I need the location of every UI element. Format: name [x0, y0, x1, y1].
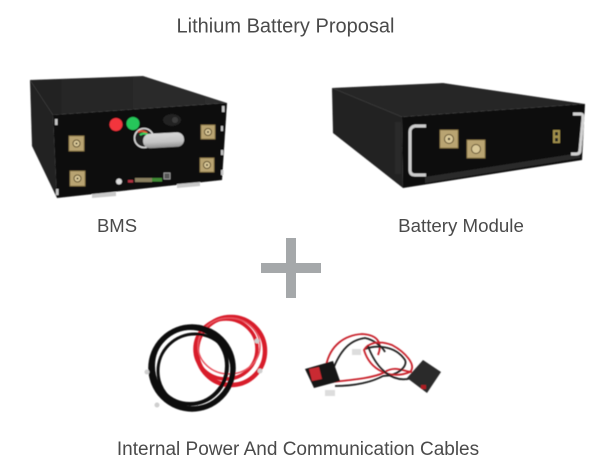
communication ports — [553, 130, 560, 143]
BMS ports row — [116, 173, 170, 184]
BMS brass terminals — [69, 125, 215, 186]
module brass terminals — [440, 130, 485, 158]
right handle — [571, 114, 583, 154]
white connectors — [325, 349, 361, 396]
module side face — [332, 88, 403, 188]
BMS rotary knob — [163, 114, 181, 126]
rocker switch — [305, 361, 340, 388]
BMS mounting feet — [92, 182, 200, 198]
BMS green indicator — [126, 117, 140, 130]
black power cable — [151, 327, 233, 409]
power cables illustration — [144, 317, 265, 409]
module front panel — [402, 104, 585, 188]
wire loops — [326, 334, 412, 386]
BMS top face — [30, 76, 227, 115]
module vents — [395, 122, 580, 183]
BATTERY label: Battery Module — [398, 215, 524, 236]
battery module illustration — [332, 83, 585, 188]
BMS rack holes — [55, 106, 224, 195]
BMS front panel — [53, 103, 227, 198]
title: Lithium Battery Proposal — [177, 16, 394, 38]
plus sign — [261, 238, 321, 298]
BMS side face — [30, 80, 57, 198]
black fuse holder — [407, 360, 441, 393]
module top face — [332, 83, 585, 117]
BMS label: BMS — [97, 215, 137, 236]
BMS breaker handle — [134, 128, 184, 149]
BMS unit illustration — [30, 76, 227, 198]
BMS red indicator — [110, 118, 122, 131]
left handle — [410, 126, 426, 175]
communication cables illustration — [305, 334, 441, 396]
lugs — [144, 338, 262, 408]
red power cable — [195, 317, 265, 385]
cables label: Internal Power And Communication Cables — [117, 439, 479, 460]
